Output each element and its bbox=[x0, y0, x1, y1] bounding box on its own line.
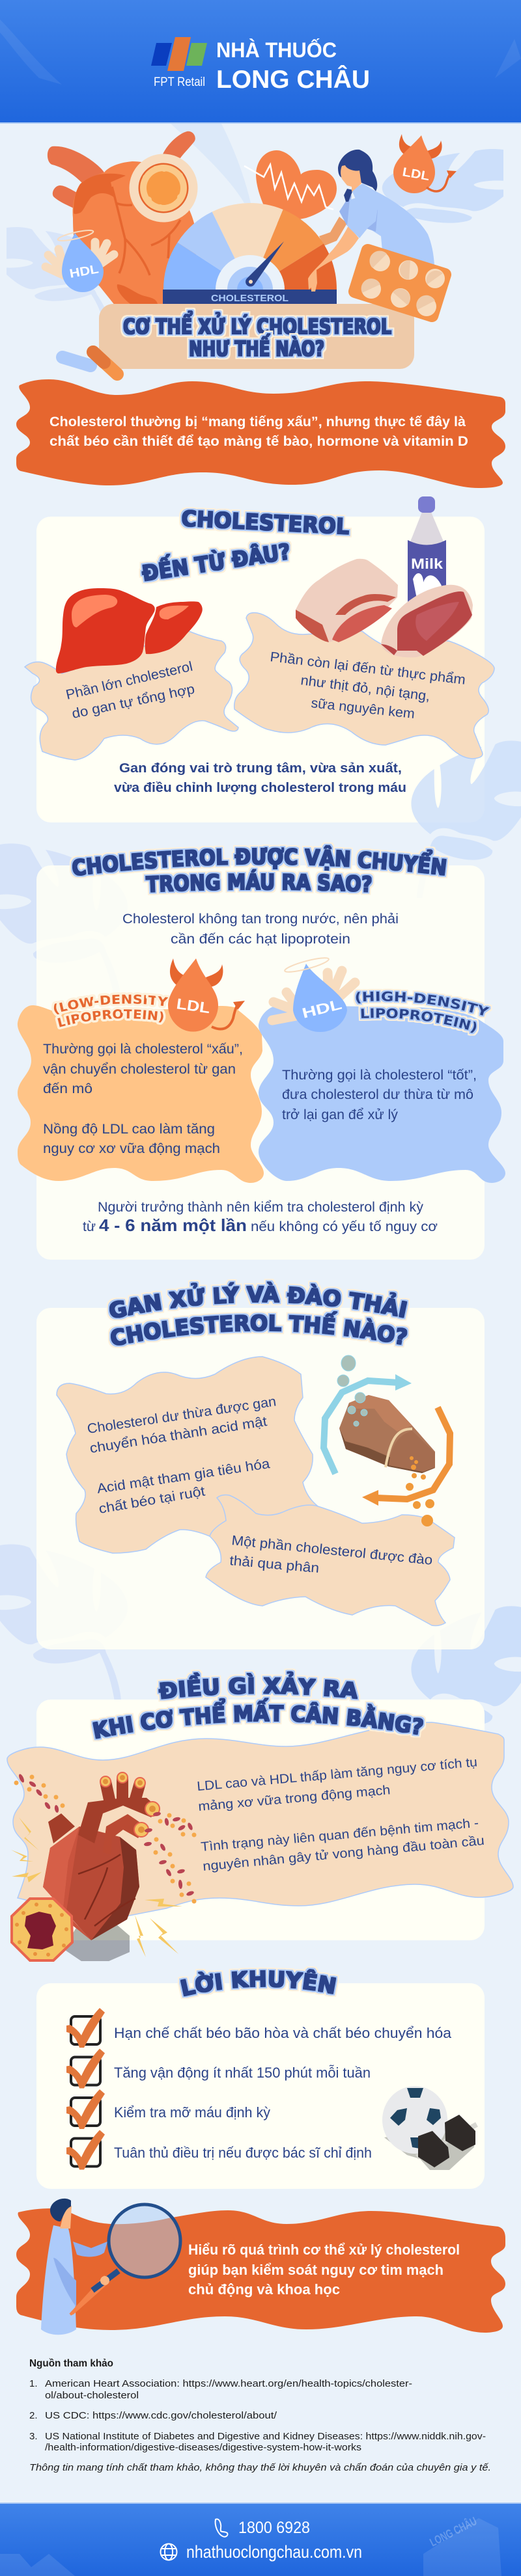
closing banner: Hiểu rõ quá trình cơ thể xử lý cholesterol bbox=[188, 2242, 460, 2258]
icon: woman in blue shirt, behind gauge bbox=[319, 217, 347, 246]
blob: excretion text bbox=[206, 1495, 455, 1625]
intro banner bbox=[16, 379, 505, 488]
references bbox=[29, 2358, 491, 2473]
heading: CHOLESTEROL THẾ NÀO? bbox=[108, 1308, 410, 1348]
LDL label bbox=[51, 992, 170, 1029]
checklist item 1: Hạn chế chất béo bão hòa và chất béo chuyển hóa bbox=[114, 2025, 452, 2041]
checklist item 4: Tuân thủ điều trị nếu được bác sĩ chỉ định bbox=[114, 2145, 372, 2161]
LDL text: Thường gọi là cholesterol “xấu”, bbox=[43, 1042, 243, 1057]
icon: cholesterol gauge: CHOLESTEROL bbox=[211, 293, 289, 304]
references: US National Institute of Diabetes and Digestive and Kidney Diseases: https://www.niddk.nih.gov- bbox=[45, 2431, 486, 2442]
screening note: nếu không có yếu tố nguy cơ bbox=[251, 1219, 438, 1234]
blob: bile acid text bbox=[57, 1357, 317, 1553]
icon: cholesterol gauge bbox=[163, 203, 337, 305]
heading: GAN XỬ LÝ VÀ ĐÀO THẢI bbox=[107, 1279, 410, 1321]
main title: CƠ THỂ XỬ LÝ CHOLESTEROL bbox=[123, 311, 391, 339]
icon: milk bottle bbox=[408, 496, 446, 602]
intro text: cần đến các hạt lipoprotein bbox=[171, 932, 350, 947]
intro banner: Cholesterol thường bị “mang tiếng xấu”, nhưng thực tế đây là bbox=[49, 414, 466, 429]
LDL label: LIPOPROTEIN) bbox=[55, 1007, 165, 1029]
references: Nguồn tham khảo bbox=[29, 2358, 113, 2369]
blob: food text: Phần còn lại đến từ thực phẩm bbox=[269, 649, 466, 688]
heading bbox=[90, 1668, 426, 1741]
HDL text bbox=[282, 1068, 477, 1122]
checklist item 2 bbox=[66, 2048, 371, 2089]
references: ol/about-cholesterol bbox=[45, 2390, 139, 2401]
icon: HDL angel drop: HDL bbox=[68, 262, 100, 281]
decorative leaf over card bbox=[411, 740, 521, 898]
icon: pork cut bbox=[296, 559, 398, 642]
checklist item 3: Kiểm tra mỡ máu định kỳ bbox=[114, 2104, 270, 2121]
logo: FPT Retail bbox=[151, 37, 207, 89]
heading: CHOLESTEROL ĐƯỢC VẬN CHUYỂN bbox=[70, 842, 449, 878]
checklist item 2: Tăng vận động ít nhất 150 phút mỗi tuần bbox=[114, 2065, 371, 2081]
icon: liver bbox=[56, 588, 203, 673]
references: 2. bbox=[29, 2410, 38, 2421]
HDL label bbox=[353, 989, 492, 1036]
icon: man with magnifying glass bbox=[41, 2199, 189, 2335]
hero illustration bbox=[46, 131, 457, 374]
icon: capsules bbox=[63, 352, 117, 374]
panel: advice bbox=[36, 1966, 485, 2189]
icon: HDL angel drop bbox=[46, 228, 114, 292]
icon: LDL devil drop bbox=[168, 958, 245, 1032]
panel: transport in blood bbox=[17, 842, 505, 1260]
blob: food text: sữa nguyên kem bbox=[310, 696, 415, 722]
callout text bbox=[114, 761, 406, 795]
title panel bbox=[99, 304, 414, 369]
blob: liver text: do gan tự tổng hợp bbox=[70, 681, 196, 722]
callout text: vừa điều chỉnh lượng cholesterol trong máu bbox=[114, 781, 406, 795]
heading: KHI CƠ THỂ MẤT CÂN BẰNG? bbox=[90, 1695, 426, 1741]
HDL text: Thường gọi là cholesterol “tốt”, bbox=[282, 1068, 477, 1083]
blob: imbalance text: nguyên nhân gây tử vong hàng đầu toàn cầu bbox=[202, 1834, 485, 1874]
plaque cross-section bbox=[12, 1899, 72, 1960]
icon: blister pill pack bbox=[346, 242, 453, 324]
main title: NHƯ THẾ NÀO? bbox=[189, 334, 324, 361]
HDL text: đưa cholesterol dư thừa từ mô bbox=[282, 1087, 473, 1102]
LDL text: Nồng độ LDL cao làm tăng bbox=[43, 1122, 215, 1137]
LDL text: đến mô bbox=[43, 1081, 92, 1096]
heading: ĐIỀU GÌ XẢY RA bbox=[156, 1668, 360, 1702]
blob: food text: như thịt đỏ, nội tạng, bbox=[300, 673, 431, 704]
HDL text: trở lại gan để xử lý bbox=[282, 1107, 399, 1122]
panel: cholesterol sources bbox=[24, 496, 521, 860]
references: 3. bbox=[29, 2431, 38, 2442]
pharmacy building watermark bbox=[0, 2518, 501, 2576]
blob: liver text: Phần lớn cholesterol bbox=[64, 659, 194, 703]
footer band bbox=[0, 2502, 521, 2576]
blob: food text bbox=[234, 613, 494, 759]
panel: LDL bbox=[17, 958, 264, 1183]
blob: excretion text: Một phần cholesterol được đào bbox=[231, 1533, 433, 1568]
HDL label: LIPOPROTEIN) bbox=[358, 1006, 479, 1036]
heading: TRONG MÁU RA SAO? bbox=[143, 866, 374, 895]
artery cross-section bbox=[129, 154, 198, 223]
heading bbox=[70, 842, 449, 895]
panel: HDL bbox=[258, 957, 505, 1183]
heading bbox=[139, 507, 352, 584]
heading: ĐẾN TỪ ĐÂU? bbox=[139, 540, 292, 584]
header band bbox=[0, 0, 521, 124]
screening note: từ bbox=[83, 1219, 96, 1234]
icon: HDL angel drop: HDL bbox=[300, 996, 343, 1022]
references: /health-information/digestive-diseases/digestive-system-how-it-works bbox=[45, 2442, 361, 2453]
references: American Heart Association: https://www.heart.org/en/health-topics/cholester- bbox=[45, 2378, 412, 2389]
brand name bbox=[216, 38, 370, 94]
icon: LDL devil drop bbox=[393, 134, 457, 193]
screening note: 4 - 6 năm một lần bbox=[99, 1215, 247, 1235]
LDL text: nguy cơ xơ vữa động mạch bbox=[43, 1141, 220, 1156]
blob: bile acid text: chuyển hóa thành acid mật bbox=[89, 1414, 268, 1456]
icon: woman in blue shirt bbox=[308, 150, 435, 291]
magnifier lens bbox=[107, 2203, 182, 2279]
references: 1. bbox=[29, 2378, 38, 2389]
icon: globe bbox=[160, 2544, 177, 2560]
brand name: LONG CHÂU bbox=[216, 65, 370, 94]
brand name: NHÀ THUỐC bbox=[216, 38, 337, 62]
background leaves bbox=[0, 124, 521, 1763]
blob: bile acid text: Acid mật tham gia tiêu hóa bbox=[96, 1456, 271, 1497]
icon: football and dumbbell bbox=[382, 2086, 477, 2170]
blob: imbalance text: mảng xơ vữa trong động mạch bbox=[198, 1783, 391, 1814]
checklist item 1 bbox=[66, 2008, 452, 2048]
checklist item 3 bbox=[66, 2089, 270, 2129]
screening note: Người trưởng thành nên kiểm tra cholesterol định kỳ bbox=[98, 1200, 423, 1215]
blob: excretion text: thải qua phân bbox=[229, 1553, 320, 1576]
icon: HDL angel drop bbox=[272, 955, 355, 1032]
phone number: 1800 6928 bbox=[238, 2519, 310, 2537]
logo: FPT Retail: FPT Retail bbox=[154, 75, 205, 89]
lightning bolts bbox=[11, 1817, 182, 1957]
blob: liver text bbox=[25, 631, 238, 760]
references: US CDC: https://www.cdc.gov/cholesterol/about/ bbox=[45, 2410, 277, 2421]
intro text: Cholesterol không tan trong nước, nên phải bbox=[122, 912, 399, 927]
icon: LDL devil drop: LDL bbox=[401, 165, 431, 183]
LDL label: (LOW-DENSITY bbox=[51, 992, 170, 1016]
intro banner: chất béo cần thiết để tạo màng tế bào, hormone và vitamin D bbox=[49, 434, 468, 449]
LDL text: vận chuyển cholesterol từ gan bbox=[43, 1062, 236, 1077]
main title bbox=[123, 311, 391, 361]
intro text bbox=[122, 912, 399, 947]
blob: imbalance text: LDL cao và HDL thấp làm tăng nguy cơ tích tụ bbox=[197, 1755, 478, 1794]
panel: liver processing bbox=[36, 1279, 485, 1649]
heading: LỜI KHUYÊN bbox=[178, 1966, 339, 1999]
blob: imbalance text: Tình trạng này liên quan đến bệnh tim mạch - bbox=[201, 1816, 479, 1854]
heading bbox=[107, 1279, 410, 1348]
heading: CHOLESTEROL bbox=[179, 507, 352, 537]
icon: anatomical heart bbox=[48, 131, 198, 306]
callout text: Gan đóng vai trò trung tâm, vừa sản xuất, bbox=[119, 761, 402, 776]
icon: low-poly heart with plaque bbox=[11, 1772, 197, 1961]
blob: bile acid text: chất béo tại ruột bbox=[98, 1484, 206, 1517]
icon: phone bbox=[216, 2519, 227, 2537]
panel: imbalance bbox=[7, 1668, 514, 1962]
plaque particles bbox=[14, 1773, 197, 1904]
HDL label: (HIGH-DENSITY bbox=[353, 989, 492, 1018]
icon: heart with ECG bbox=[244, 150, 337, 224]
closing banner: giúp bạn kiểm soát nguy cơ tim mạch bbox=[188, 2262, 444, 2278]
icon: LDL devil drop: LDL bbox=[175, 995, 211, 1016]
storefront sign: LONG CHÂU bbox=[427, 2514, 479, 2549]
website: nhathuoclongchau.com.vn bbox=[186, 2542, 362, 2562]
icon: beef cut bbox=[381, 585, 473, 657]
closing banner: chủ động và khoa học bbox=[188, 2281, 340, 2298]
blob: imbalance text bbox=[7, 1722, 513, 1919]
icon: milk bottle: Milk bbox=[411, 556, 444, 572]
closing banner bbox=[16, 2199, 505, 2335]
references: Thông tin mang tính chất tham khảo, không thay thế lời khuyên và chẩn đoán của chuyên gia y tế. bbox=[29, 2462, 491, 2473]
blob: bile acid text: Cholesterol dư thừa được gan bbox=[86, 1394, 277, 1437]
icon: liver with cycle arrows bbox=[324, 1355, 450, 1526]
screening note bbox=[83, 1200, 438, 1235]
checklist item 4 bbox=[66, 2130, 372, 2169]
LDL text bbox=[43, 1042, 243, 1156]
